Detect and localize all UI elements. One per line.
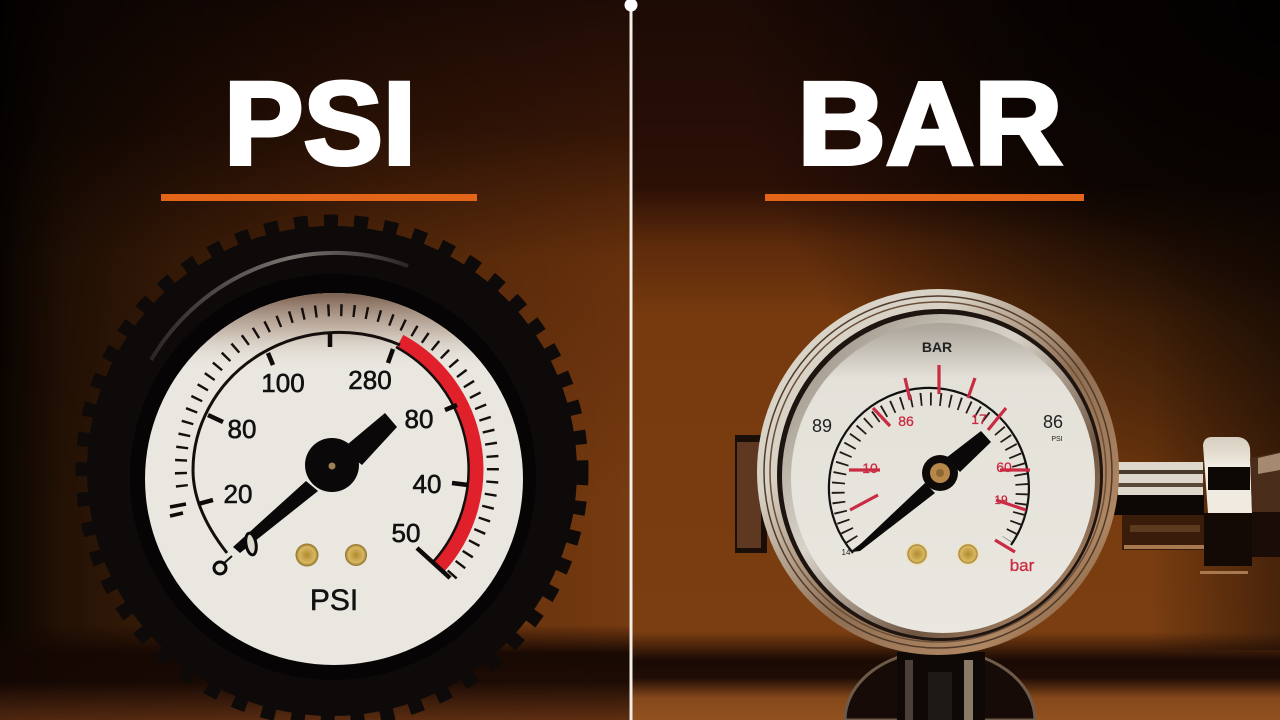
- rear bracket: [735, 435, 767, 553]
- heading: PSI: PSI: [224, 58, 416, 190]
- scale numbers: 100: [261, 368, 305, 398]
- scale numbers: 19: [994, 493, 1008, 507]
- unit label: PSI: [310, 584, 358, 617]
- scale numbers: 50: [392, 518, 420, 548]
- underline: BAR: [765, 194, 1084, 201]
- divider line with dot: [624, 0, 638, 720]
- panel: PSI background: [0, 0, 631, 720]
- outer labels: 89: [812, 416, 832, 436]
- brass screws: [906, 544, 978, 564]
- needle: [852, 431, 991, 552]
- outer labels: 14: [842, 548, 851, 557]
- needle: [214, 413, 397, 574]
- knurled black rim: [82, 221, 582, 720]
- outer labels: 86: [1043, 412, 1063, 432]
- gauge: PSI tyre-style gauge: [82, 221, 582, 720]
- scale numbers: 20: [224, 479, 252, 509]
- panel: BAR background: [632, 0, 1280, 720]
- scale numbers: 280: [348, 365, 392, 395]
- dial face: [145, 293, 523, 665]
- scale numbers: 40: [413, 469, 441, 499]
- scale numbers: bar: [1010, 556, 1035, 575]
- major ticks: [170, 333, 468, 578]
- stand: [845, 650, 1035, 720]
- outer labels: PSI: [1051, 436, 1063, 443]
- scale numbers: 80: [228, 414, 256, 444]
- outer labels: BAR: [922, 339, 952, 355]
- dial face top shading: [145, 293, 523, 665]
- red zone arc: [400, 341, 476, 567]
- scale arc and ticks: [829, 365, 1030, 553]
- scale numbers: [862, 411, 1035, 575]
- tick ring: [181, 310, 493, 580]
- brass screws: [296, 544, 367, 566]
- scale numbers: 80: [405, 404, 433, 434]
- scale numbers: 10: [862, 460, 878, 476]
- outer labels: [812, 339, 1063, 557]
- underline: PSI: [161, 194, 477, 201]
- heading: BAR: BAR: [798, 58, 1062, 190]
- gauge: BAR chrome gauge with fitting: [735, 289, 1280, 720]
- pipe and nut fitting: [1112, 437, 1280, 574]
- dial face: [791, 323, 1095, 633]
- scale numbers: [224, 365, 441, 548]
- scale numbers: 60: [996, 459, 1012, 475]
- chrome bezel: [757, 289, 1119, 655]
- scale numbers: 17: [971, 411, 987, 427]
- scale numbers: 86: [898, 413, 914, 429]
